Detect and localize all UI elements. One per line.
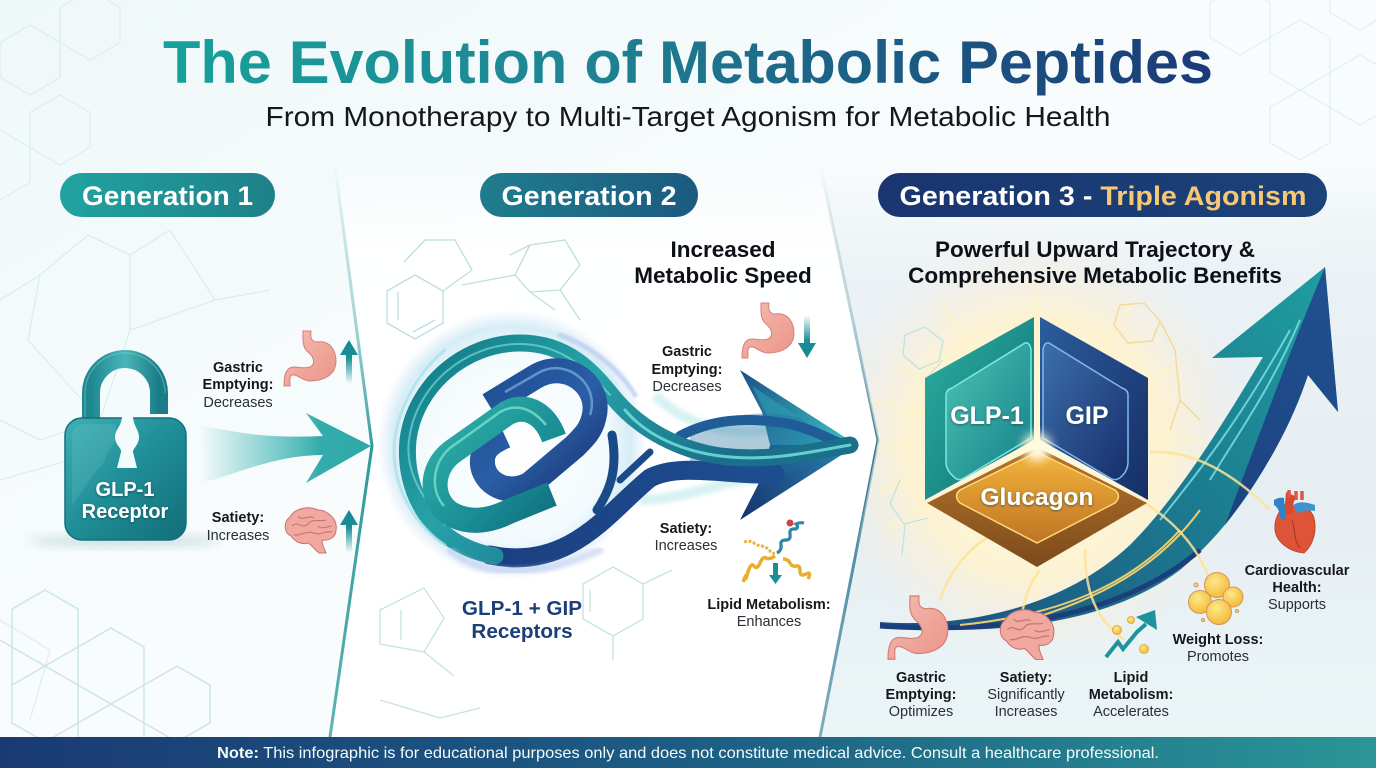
heading: powerful upward trajectory: Powerful Upward Trajectory &	[935, 237, 1255, 262]
icon: gen 3 stomach	[888, 596, 948, 659]
text: gen 3 gastric emptying: Emptying:	[886, 687, 956, 703]
label: GLP-1 + GIP receptors: GLP-1 + GIP	[462, 597, 582, 620]
icon: gen 1 satiety up arrow	[340, 510, 358, 553]
text: gen 3 lipid metabolism: Lipid	[1114, 670, 1148, 686]
label: GLP-1 + GIP receptors: Receptors	[471, 620, 573, 643]
heading: increased metabolic speed	[634, 237, 812, 288]
GLP-1 face	[925, 317, 1034, 500]
icon: gen 2 linked receptors with arrow	[377, 310, 857, 580]
icon: gen 1 up arrow	[340, 340, 358, 384]
text: gen 2 lipid metabolism: Lipid Metabolism:	[707, 597, 831, 613]
text: gen 3 lipid metabolism: Metabolism:	[1089, 687, 1173, 703]
icon: GLP-1 receptor lock: GLP-1	[96, 479, 154, 501]
label: GLP-1 + GIP receptors	[462, 597, 582, 643]
text: gen 3 cardiovascular: Health:	[1272, 580, 1322, 596]
text: gen 2 satiety	[655, 521, 717, 554]
generation 1 badge: Generation 1	[82, 181, 253, 211]
text: gen 3 gastric emptying	[886, 670, 956, 720]
icon: gen 2 stomach	[742, 303, 794, 358]
outer ring and strands	[394, 335, 850, 571]
text: gen 2 satiety: Satiety:	[660, 521, 712, 537]
icon: gen 1 brain	[285, 508, 336, 553]
glucagon face: Glucagon	[981, 484, 1093, 511]
panel dividers	[330, 165, 878, 737]
text: gen 2 lipid metabolism: Enhances	[737, 614, 801, 630]
text: gen 2 gastric emptying: Decreases	[652, 379, 722, 395]
big upward trajectory arrow	[880, 267, 1338, 630]
icon: gen 3 lipid trend	[1106, 610, 1157, 657]
text: gen 3 satiety: Increases	[995, 704, 1057, 720]
text: gen 2 satiety: Increases	[655, 538, 717, 554]
text: gen 1 gastric emptying: Emptying:	[203, 377, 273, 393]
subtitle: From Monotherapy to Multi-Target Agonism for Metabolic Health	[266, 101, 1110, 132]
text: gen 3 satiety: Satiety:	[1000, 670, 1052, 686]
text: gen 3 satiety	[987, 670, 1065, 720]
text: gen 3 satiety: Significantly	[987, 687, 1065, 703]
generation 1 arrow	[200, 413, 371, 484]
text: gen 1 satiety: Increases	[207, 528, 269, 544]
generation 1 badge	[60, 173, 275, 217]
text: gen 3 weight loss: Promotes	[1187, 649, 1249, 665]
text: gen 1 satiety	[207, 510, 269, 544]
GLP-1 face: GLP-1	[950, 402, 1024, 430]
generation 3 badge	[878, 173, 1327, 217]
icon: gen 3 brain	[1000, 610, 1054, 660]
text: gen 1 satiety: Satiety:	[212, 510, 264, 526]
heading: increased metabolic speed: Metabolic Speed	[634, 263, 812, 288]
heading: powerful upward trajectory: Comprehensive Metabolic Benefits	[908, 263, 1282, 288]
icon: gen 2 lipid molecule	[743, 520, 810, 584]
GIP face	[1040, 317, 1148, 500]
heading: powerful upward trajectory	[908, 237, 1282, 288]
heading: increased metabolic speed: Increased	[670, 237, 776, 262]
glucagon face	[927, 447, 1147, 567]
text: gen 3 cardiovascular	[1245, 563, 1350, 613]
icon: gen 2 down arrow	[798, 315, 816, 358]
teal chain link	[435, 408, 554, 520]
navy chain link	[482, 368, 595, 489]
arrow head	[690, 370, 857, 520]
generation 2 badge	[480, 173, 698, 217]
text: gen 3 cardiovascular: Cardiovascular	[1245, 563, 1350, 579]
text: gen 1 gastric emptying	[203, 360, 273, 411]
text: gen 2 gastric emptying: Gastric	[662, 344, 712, 360]
glow and rays behind the gem	[856, 262, 1218, 629]
text: gen 2 lipid metabolism	[707, 597, 831, 630]
icon: GLP-1 receptor lock: Receptor	[82, 501, 169, 523]
text: gen 3 weight loss	[1173, 632, 1263, 665]
text: gen 3 weight loss: Weight Loss:	[1173, 632, 1263, 648]
triple agonist hexagon gem	[925, 317, 1148, 567]
text: gen 2 gastric emptying	[652, 344, 722, 395]
icon: gen 3 fat cells	[1188, 572, 1243, 624]
text: gen 3 gastric emptying: Gastric	[896, 670, 946, 686]
title: The Evolution of Metabolic Peptides	[163, 29, 1213, 96]
generation 3 badge: Generation 3 - Triple Agonism	[900, 181, 1306, 211]
text: gen 3 lipid metabolism: Accelerates	[1093, 704, 1169, 720]
GIP face: GIP	[1065, 402, 1109, 430]
text: gen 3 lipid metabolism	[1089, 670, 1173, 720]
icon: gen 1 stomach	[284, 331, 336, 386]
footer disclaimer	[0, 737, 1376, 768]
golden energy arcs	[940, 452, 1270, 650]
text: gen 1 gastric emptying: Gastric	[213, 360, 263, 376]
footer disclaimer: Note: This infographic is for educational purposes only and does not constitute medical advice. Consult a healthcare professional.	[217, 745, 1159, 762]
icon: gen 3 heart	[1274, 490, 1315, 553]
generation 2 badge: Generation 2	[502, 181, 676, 211]
text: gen 1 gastric emptying: Decreases	[203, 395, 273, 411]
text: gen 3 cardiovascular: Supports	[1268, 597, 1326, 613]
text: gen 3 gastric emptying: Optimizes	[889, 704, 953, 720]
text: gen 2 gastric emptying: Emptying:	[652, 362, 722, 378]
icon: GLP-1 receptor lock	[30, 353, 220, 547]
